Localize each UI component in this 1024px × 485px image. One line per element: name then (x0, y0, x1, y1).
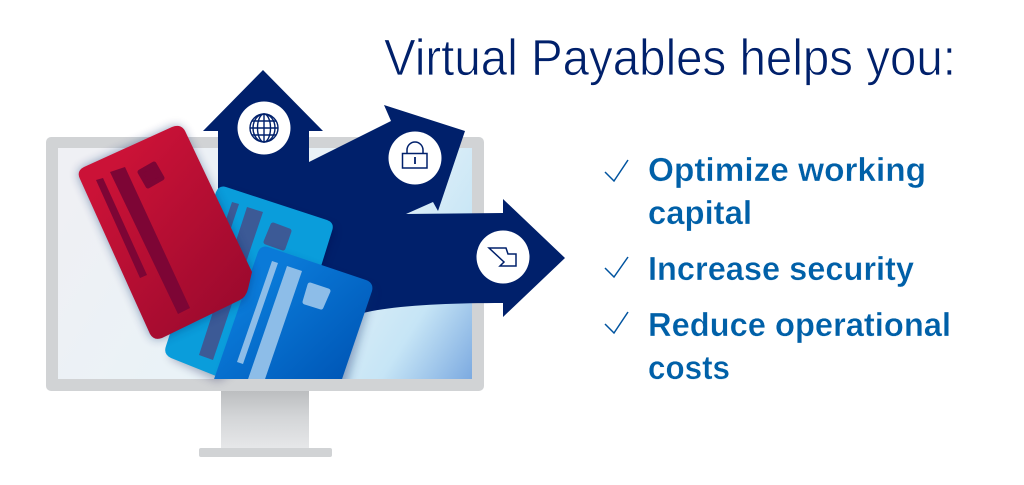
title: Virtual Payables helps you: (384, 29, 956, 86)
benefit: reduce operational costs: costs (648, 349, 730, 386)
benefit: increase security: Increase security (648, 250, 915, 287)
red card (79, 126, 252, 339)
monitor base (199, 448, 332, 457)
benefit: optimize working capital (605, 151, 926, 231)
check icon (605, 257, 628, 277)
light blue card stripes (215, 202, 239, 255)
red card chip (140, 164, 162, 186)
icon: globe (238, 102, 290, 154)
monitor frame (46, 137, 484, 391)
monitor screen (58, 148, 472, 379)
benefit: optimize working capital: capital (648, 194, 752, 231)
check icon (605, 160, 628, 181)
check icon (605, 312, 628, 333)
benefit: reduce operational costs (605, 306, 951, 386)
light blue card (165, 187, 334, 381)
light blue card chip (266, 225, 289, 248)
arrows: three navy arrows bursting from the screen (203, 70, 565, 330)
monitor (46, 137, 484, 457)
icon: diagonal arrow (476, 230, 530, 284)
red card stripes (96, 178, 147, 278)
icon: padlock (388, 132, 442, 184)
blue card (212, 247, 373, 388)
benefit: optimize working capital: Optimize working (648, 151, 926, 188)
benefit: reduce operational costs: Reduce operational (648, 306, 951, 343)
blue card stripes (237, 261, 278, 364)
monitor stand (221, 391, 309, 448)
blue card chip (305, 285, 328, 307)
